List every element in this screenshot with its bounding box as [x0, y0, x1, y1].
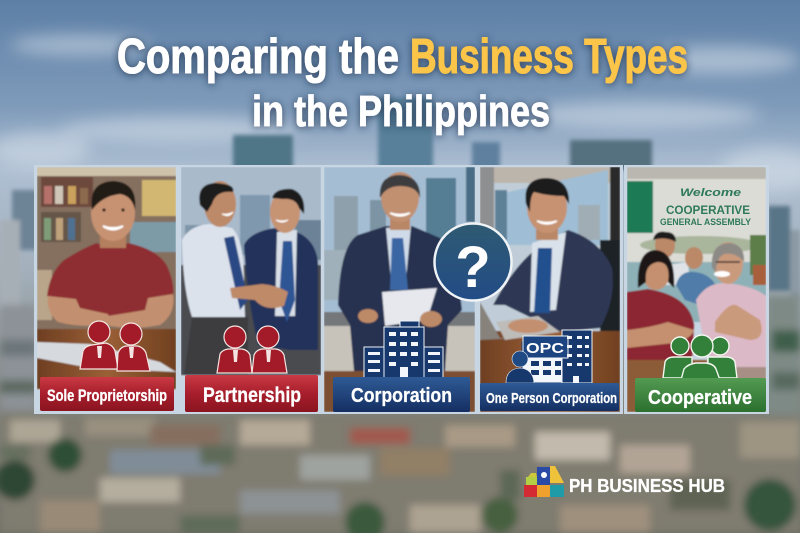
- sign text: COOPERATIVE: [666, 203, 750, 217]
- label: corporation: [333, 377, 470, 412]
- wordmark: PH BUSINESS HUB: [569, 476, 725, 496]
- label: cooperative: [635, 378, 766, 412]
- label: one person corporation: One Person Corporation: [486, 390, 617, 407]
- icon: question mark badge: [434, 224, 512, 300]
- panel: cooperative: [624, 165, 769, 414]
- icon: OPC building: OPC: [526, 340, 564, 357]
- sign text: [660, 187, 751, 227]
- photo: handshake: [181, 167, 321, 375]
- sign text: Welcome: [680, 187, 741, 199]
- title line 1: Business Types: [410, 30, 688, 84]
- panel: partnership: [178, 165, 324, 414]
- label: cooperative: Cooperative: [648, 387, 752, 409]
- logo mark: [524, 466, 564, 497]
- title line 1: Comparing the: [117, 30, 399, 84]
- photo: founder at laptop: [480, 167, 620, 412]
- label: corporation: Corporation: [351, 385, 452, 407]
- label: partnership: [185, 375, 318, 412]
- sign text: GENERAL ASSEMBLY: [660, 217, 751, 227]
- photo: assembly crowd: [627, 167, 766, 412]
- title line 2: in the Philippines: [252, 87, 550, 136]
- label: sole proprietorship: [40, 377, 174, 411]
- icon: partners figures: [217, 326, 287, 373]
- panel: corporation: [321, 165, 478, 414]
- logo: PH Business Hub: [524, 466, 725, 497]
- label: sole proprietorship: Sole Proprietorship: [47, 387, 167, 405]
- photo: executive with paper: [324, 167, 475, 412]
- icon: sole proprietor figures: [80, 321, 150, 371]
- panel: one person corporation: [477, 165, 623, 414]
- icon: cooperative group: [663, 335, 737, 380]
- icon: corporate building: [364, 321, 443, 378]
- icon: OPC building: [506, 330, 592, 383]
- photo: shop owner: [37, 167, 176, 389]
- title: [117, 30, 688, 136]
- icon: question mark badge: ?: [455, 235, 491, 300]
- label: partnership: Partnership: [203, 384, 301, 407]
- panel: sole proprietorship: [34, 165, 179, 414]
- label: one person corporation: [480, 383, 619, 411]
